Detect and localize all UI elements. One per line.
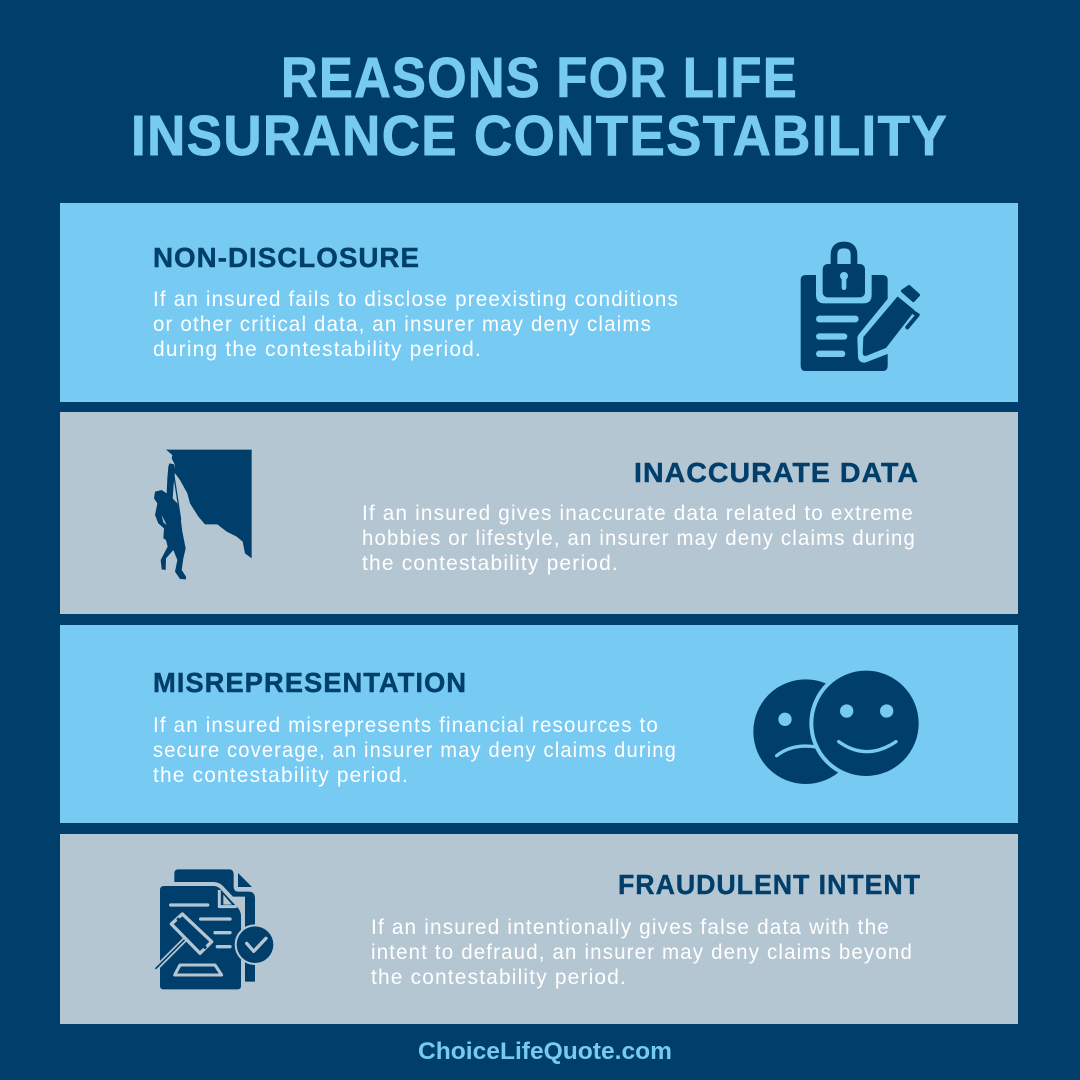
title: INSURANCE CONTESTABILITY [131, 104, 948, 168]
text block: non-disclosure [153, 288, 679, 361]
panel: fraudulent intent [60, 834, 1018, 1024]
text block: fraudulent intent: intent to defraud, an insurer may deny claims beyond [371, 941, 913, 964]
icon: rock climber silhouette [154, 450, 252, 579]
text block: misrepresentation [153, 714, 677, 787]
icon: clipboard with lock and pen [801, 245, 918, 371]
panel: non-disclosure [60, 203, 1018, 402]
text block: misrepresentation: secure coverage, an insurer may deny claims during [153, 739, 677, 762]
heading: misrepresentation: MISREPRESENTATION [153, 667, 467, 698]
text block: fraudulent intent: the contestability period. [371, 966, 627, 989]
text block: fraudulent intent [371, 916, 913, 989]
text block: non-disclosure: or other critical data, an insurer may deny claims [153, 313, 652, 336]
title [131, 46, 948, 168]
text block: inaccurate data: If an insured gives inaccurate data related to extreme [362, 502, 914, 525]
title: REASONS FOR LIFE [281, 46, 798, 110]
text block: fraudulent intent: If an insured intentionally gives false data with the [371, 916, 890, 939]
text block: non-disclosure: If an insured fails to disclose preexisting conditions [153, 288, 679, 311]
icon: sad and happy faces [753, 669, 921, 784]
heading: non-disclosure: NON-DISCLOSURE [153, 242, 420, 273]
text block: misrepresentation: the contestability period. [153, 764, 409, 787]
footer: website: ChoiceLifeQuote.com [418, 1038, 672, 1065]
heading: fraudulent intent: FRAUDULENT INTENT [618, 869, 921, 900]
text block: inaccurate data: hobbies or lifestyle, an insurer may deny claims during [362, 527, 916, 550]
text block: inaccurate data [362, 502, 916, 575]
panel: misrepresentation [60, 625, 1018, 823]
text block: misrepresentation: If an insured misrepresents financial resources to [153, 714, 659, 737]
text block: non-disclosure: during the contestability period. [153, 338, 482, 361]
icon: legal documents with gavel and check mark [156, 869, 273, 989]
heading: inaccurate data: INACCURATE DATA [634, 457, 919, 488]
text block: inaccurate data: the contestability period. [362, 552, 619, 575]
panel: inaccurate data [60, 412, 1018, 614]
